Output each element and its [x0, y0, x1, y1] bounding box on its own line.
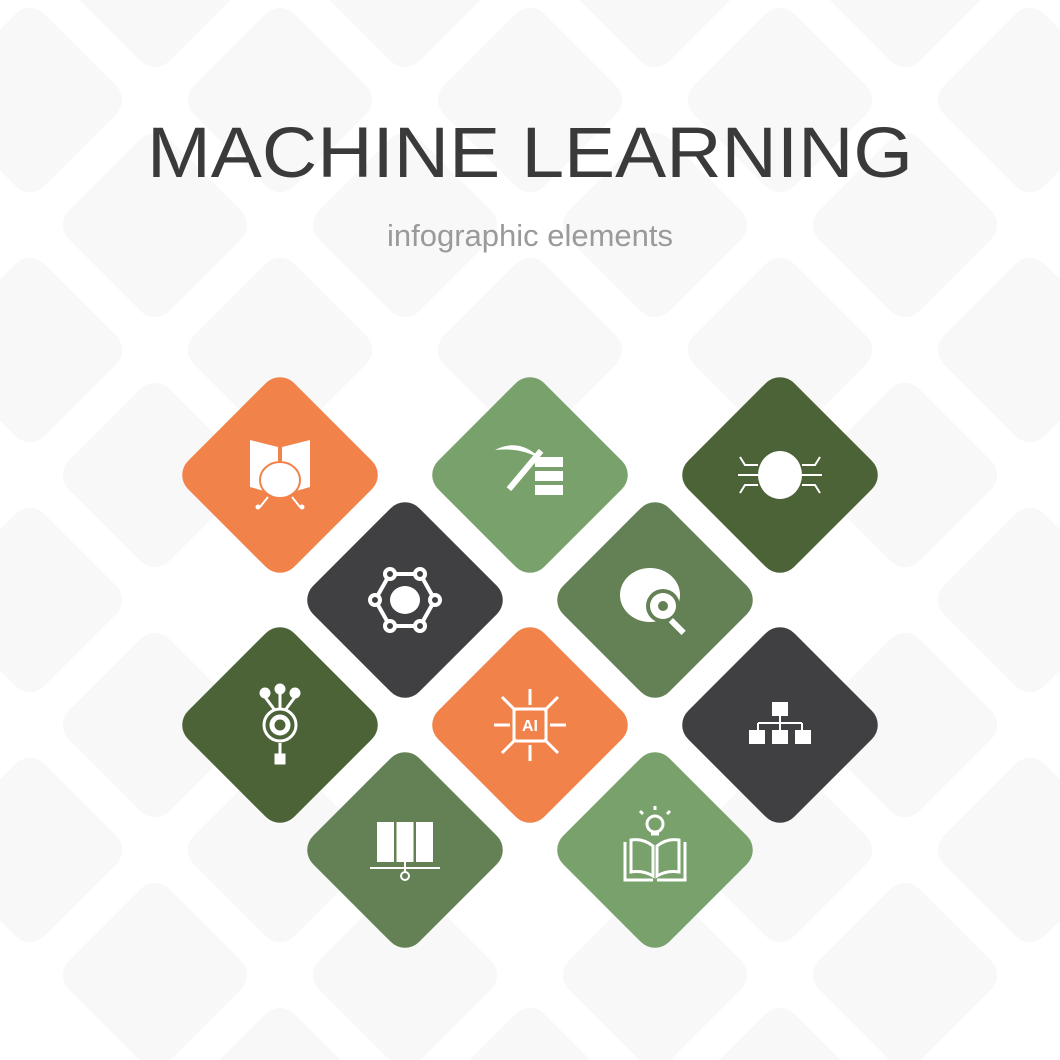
panel: hierarchy (gray) — [674, 619, 886, 831]
icon: pickaxe with data — [495, 445, 563, 495]
icon: brain network — [370, 569, 440, 631]
panel: AI chip (orange) — [424, 619, 636, 831]
panel: neural brain network (gray) — [299, 494, 511, 706]
panel: book idea (light green) — [549, 744, 761, 956]
icon: AI chip with arrows — [494, 689, 566, 761]
panel: mining (light green) — [424, 369, 636, 581]
panel: book brain (orange) — [174, 369, 386, 581]
panel: gear process (dark green) — [174, 619, 386, 831]
icon: open book with bulb — [625, 806, 685, 880]
panel: brain search (mid green) — [549, 494, 761, 706]
icon: gear with inputs — [261, 685, 299, 763]
panel: server (mid green) — [299, 744, 511, 956]
icon: AI chip with arrows: AI — [522, 718, 538, 735]
icon: book with brain — [250, 440, 310, 509]
icon: server racks — [370, 822, 440, 880]
icon: hierarchy chart — [750, 703, 810, 743]
icon: brain with connections — [738, 451, 822, 499]
title: MACHINE LEARNING — [147, 114, 913, 193]
icon: brain with gear magnifier — [620, 568, 686, 635]
subtitle: infographic elements — [387, 218, 673, 253]
panel: brain circuit (dark green) — [674, 369, 886, 581]
